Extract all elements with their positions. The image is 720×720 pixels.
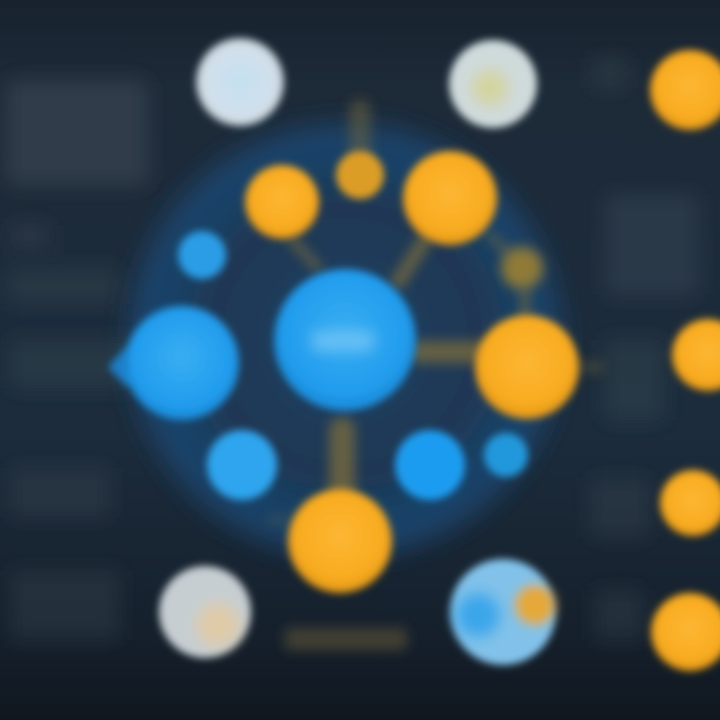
large orange node bottom	[288, 489, 392, 593]
large orange node upper right	[403, 151, 497, 245]
small blue node upper left	[178, 231, 226, 279]
bottom left white circle	[159, 566, 251, 658]
top left white circle	[196, 38, 284, 126]
blue halo ring	[117, 112, 573, 568]
right edge orange icon 1	[650, 50, 720, 130]
right edge orange icon 4	[651, 593, 720, 671]
blue node lower left	[207, 430, 277, 500]
dim orange node right	[501, 247, 543, 289]
right edge orange icon 3	[660, 470, 720, 536]
central blue node	[274, 269, 416, 411]
bottom right pie circle	[450, 559, 556, 665]
top right white circle	[449, 40, 537, 128]
left large blue node	[108, 306, 239, 420]
central label	[312, 331, 374, 351]
bottom orange caption	[285, 628, 407, 650]
left column text placeholders	[6, 80, 148, 640]
orange node upper left	[245, 165, 319, 239]
small blue node lower right	[484, 433, 528, 477]
blue node lower centre	[395, 430, 465, 500]
right column text placeholders	[590, 58, 698, 640]
connector lines	[270, 110, 600, 520]
large orange node right	[475, 315, 579, 419]
small orange node top	[336, 151, 384, 199]
right edge orange icon 2	[672, 319, 720, 391]
